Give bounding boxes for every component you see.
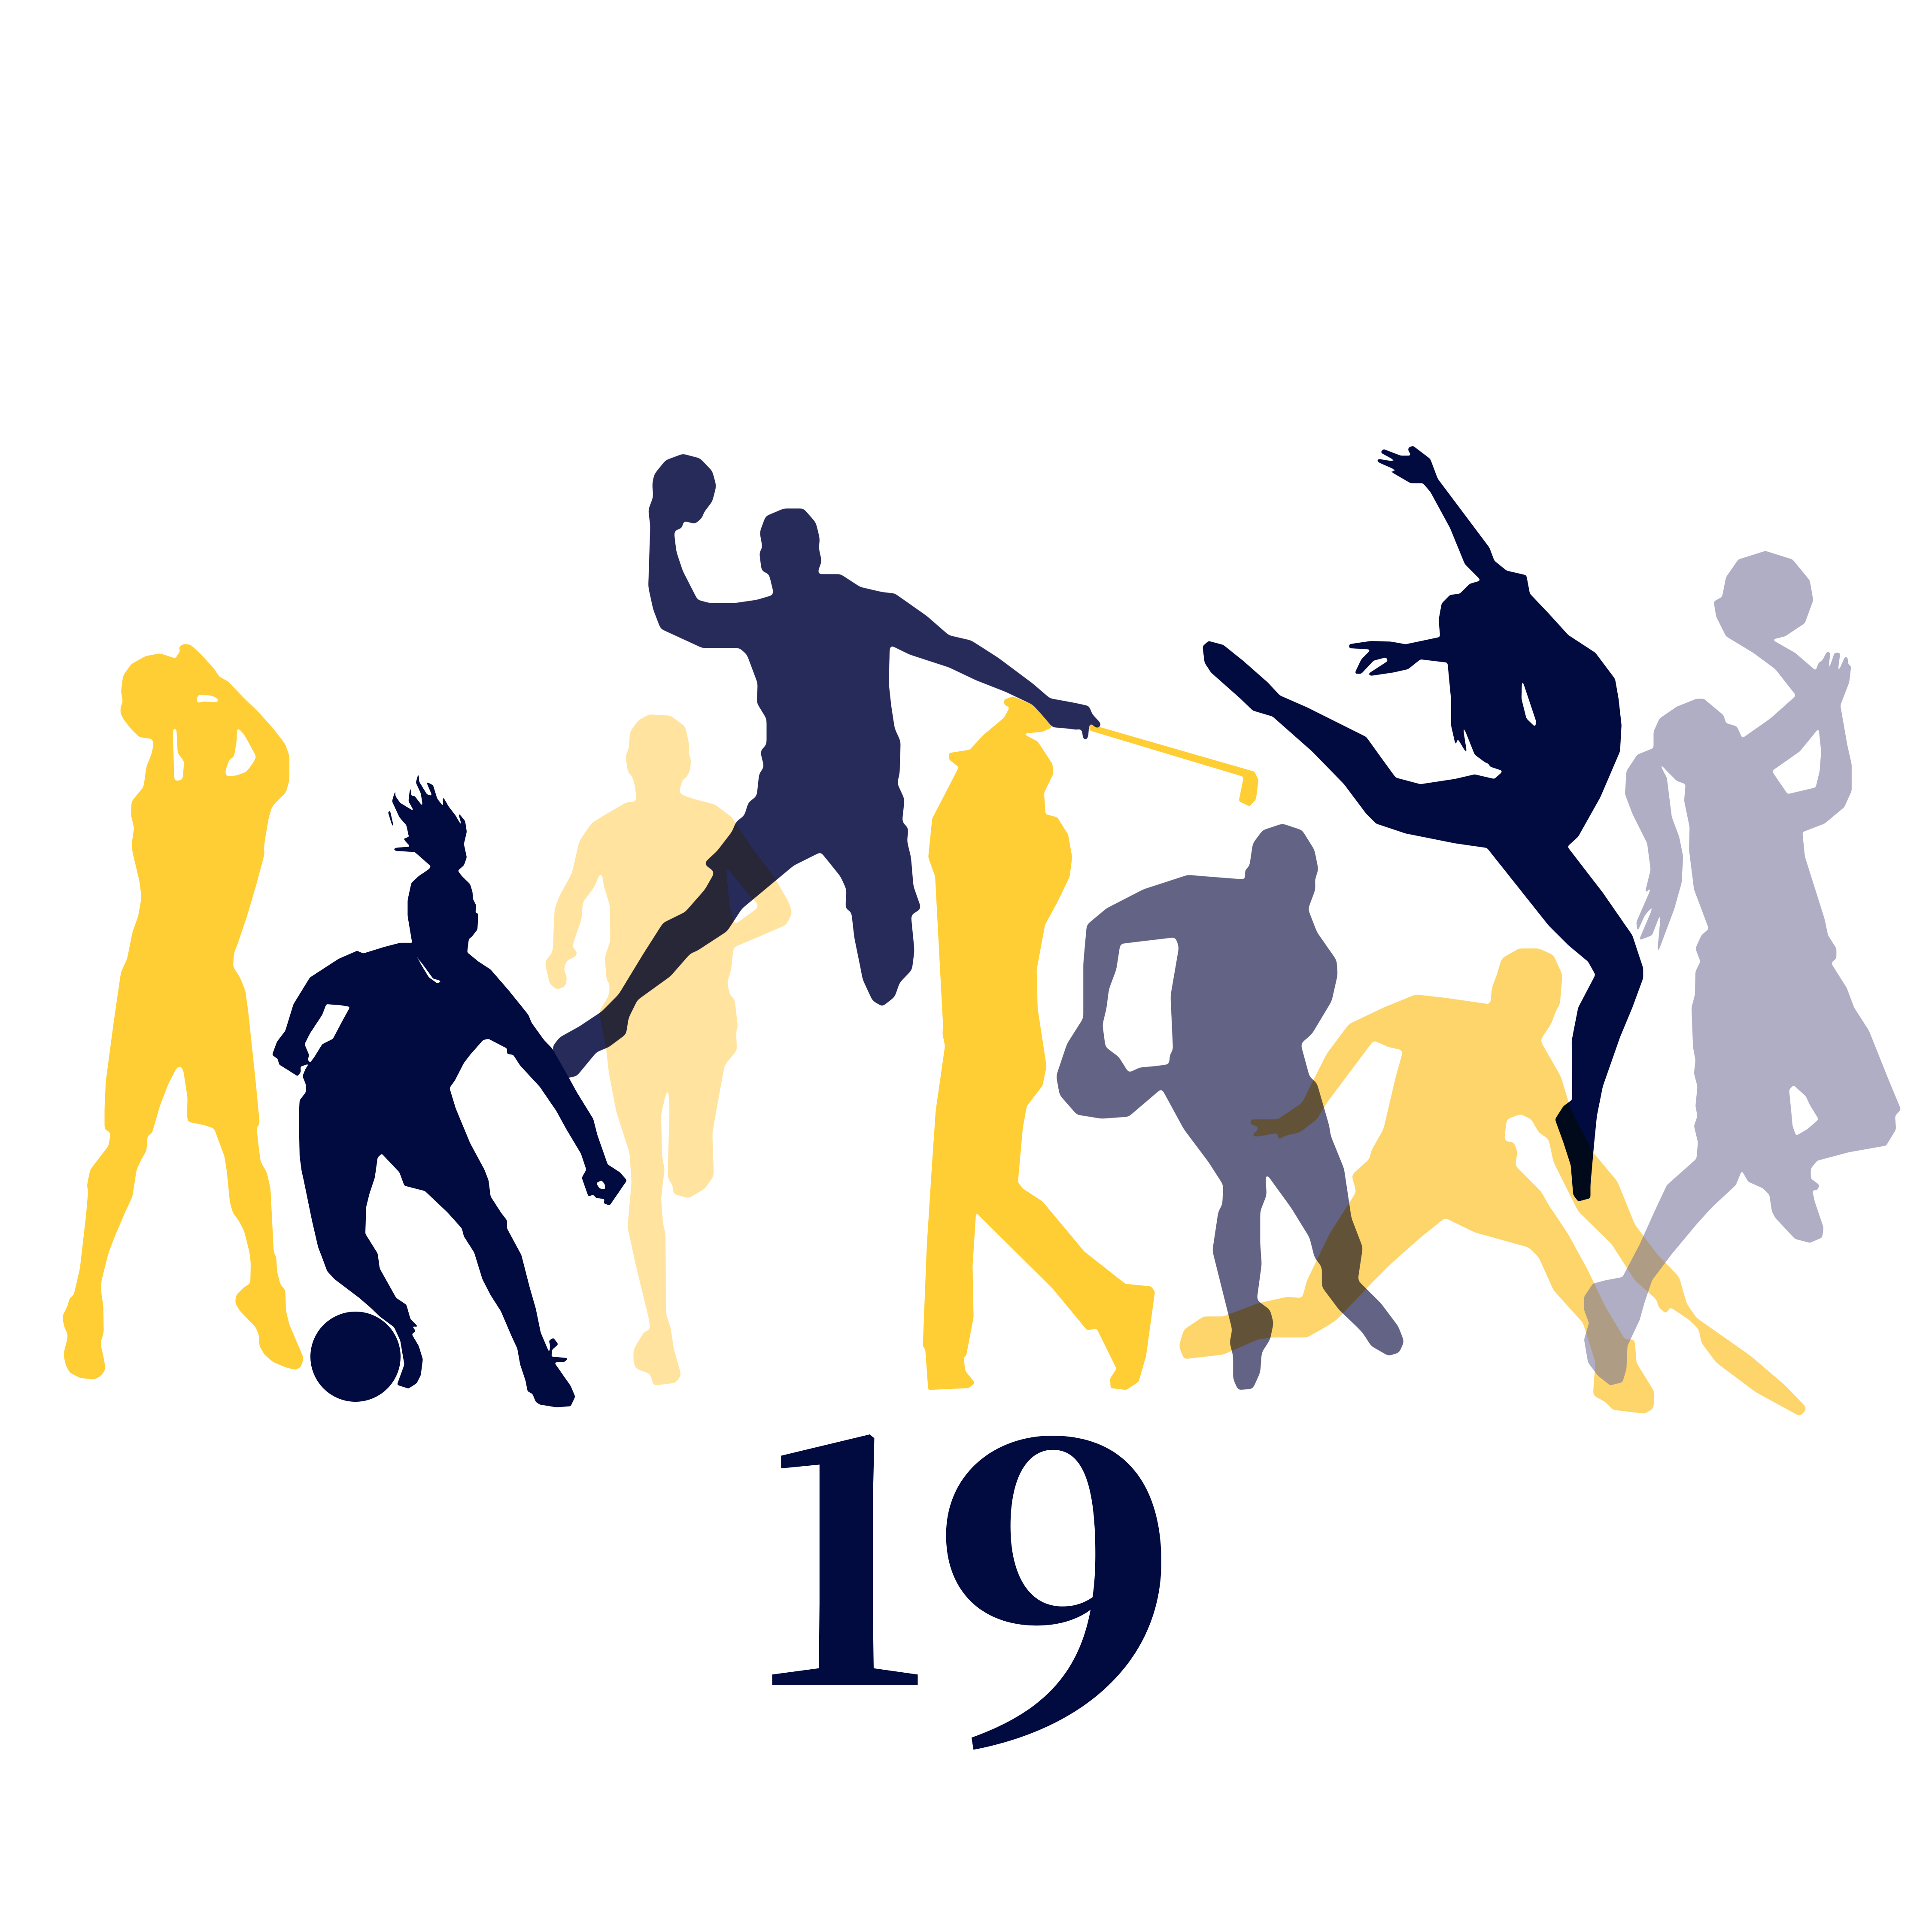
figure: golfer with club [923, 696, 1258, 1390]
figure: yellow player holding ball overhead [62, 644, 304, 1379]
figure: leaping dancer [1203, 446, 1643, 1201]
icon: football [310, 1312, 401, 1402]
title: number 19 [744, 1262, 1177, 1861]
figure: slate player carrying ball [1056, 823, 1404, 1390]
figure: footballer dribbling ball [272, 772, 627, 1407]
title: number 19: 1 [744, 1290, 944, 1784]
figure: light yellow runner [545, 714, 792, 1385]
title: number 19: 9 [932, 1262, 1177, 1861]
figure: handball player throwing [552, 454, 1103, 1079]
figure: crouching gold player [1179, 948, 1807, 1416]
figure: lavender player with ball and ponytail [1584, 551, 1901, 1385]
